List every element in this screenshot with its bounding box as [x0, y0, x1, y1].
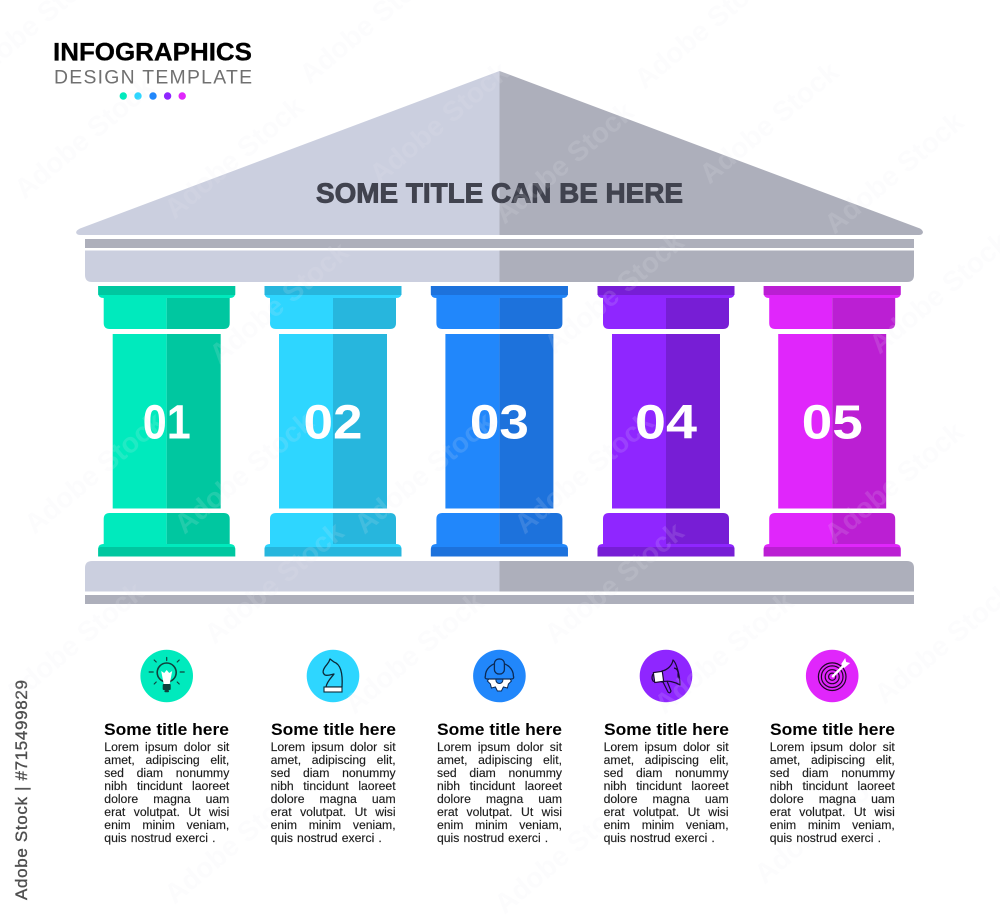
text: nibh tincidunt laoreet [104, 779, 229, 793]
text: enim minim veniam, [104, 818, 229, 832]
text: quis nostrud exerci . [104, 831, 215, 845]
column 03: 03 [470, 396, 529, 450]
text: erat volutpat. Ut wisi [437, 805, 562, 819]
column 04: 04 [635, 396, 697, 450]
text: nibh tincidunt laoreet [271, 779, 396, 793]
text: erat volutpat. Ut wisi [271, 805, 396, 819]
text: erat volutpat. Ut wisi [604, 805, 729, 819]
logo heading: infographics design template: DESIGN TEMPLATE [54, 66, 252, 88]
icon: chess knight [307, 650, 359, 702]
text: quis nostrud exerci . [271, 831, 382, 845]
stock watermark: Adobe Stock [818, 416, 970, 550]
text: enim minim veniam, [770, 818, 895, 832]
logo heading: infographics design template [53, 39, 252, 100]
text: nibh tincidunt laoreet [604, 779, 729, 793]
text: enim minim veniam, [271, 818, 396, 832]
stock watermark: Adobe Stock [203, 236, 355, 370]
text block 3 [437, 721, 562, 845]
stock watermark: Adobe Stock [8, 71, 160, 205]
stock watermark: Adobe Stock [538, 516, 690, 650]
text: sed diam nonummy [104, 766, 229, 780]
stock watermark: Adobe Stock [748, 756, 900, 890]
text: Lorem ipsum dolor sit [104, 740, 229, 754]
text: dolore magna uam [604, 792, 729, 806]
text: amet, adipiscing elit, [770, 753, 895, 767]
icon: hard hat with gear [473, 650, 526, 702]
roof title: SOME TITLE CAN BE HERE [316, 178, 683, 208]
logo heading: infographics design template: INFOGRAPHICS [53, 39, 252, 67]
text block 4 [604, 721, 729, 845]
text: erat volutpat. Ut wisi [104, 805, 229, 819]
text: sed diam nonummy [271, 766, 396, 780]
text: Lorem ipsum dolor sit [437, 740, 562, 754]
temple base: plinth and lower strip [85, 561, 914, 604]
stock watermark: Adobe Stock [338, 586, 490, 720]
text: quis nostrud exerci . [770, 831, 881, 845]
text: Some title here [604, 721, 729, 739]
icon: megaphone [640, 650, 692, 702]
text: Some title here [437, 721, 562, 739]
column 02 [264, 286, 402, 556]
text: Lorem ipsum dolor sit [271, 740, 396, 754]
column 02: 02 [303, 396, 363, 450]
entablature: upper strip and beam [85, 239, 914, 282]
column 03 [431, 286, 568, 556]
text: sed diam nonummy [604, 766, 729, 780]
text: dolore magna uam [770, 792, 895, 806]
stock watermark: Adobe Stock [693, 56, 845, 190]
text block 1 [104, 721, 230, 845]
text: dolore magna uam [271, 792, 396, 806]
stock watermark: Adobe Stock [488, 786, 640, 916]
stock watermark: Adobe Stock [198, 516, 350, 650]
stock watermark: Adobe Stock [18, 406, 170, 540]
text: Some title here [770, 721, 895, 739]
text: quis nostrud exerci . [604, 831, 715, 845]
stock watermark: Adobe Stock [648, 586, 800, 720]
column 04 [598, 286, 734, 556]
column 05: 05 [802, 396, 863, 450]
text: sed diam nonummy [437, 766, 562, 780]
stock watermark: Adobe Stock [508, 406, 660, 540]
text: Some title here [104, 721, 229, 739]
stock watermark: Adobe Stock [538, 226, 690, 360]
text: amet, adipiscing elit, [604, 753, 729, 767]
text: Some title here [271, 721, 396, 739]
icon: light bulb [140, 650, 193, 702]
text: enim minim veniam, [437, 818, 562, 832]
text: dolore magna uam [437, 792, 562, 806]
text block 2 [270, 721, 396, 845]
text: amet, adipiscing elit, [437, 753, 562, 767]
stock watermark: Adobe Stock [158, 776, 310, 910]
column 01: 01 [143, 396, 191, 450]
icon: target with arrow [806, 650, 858, 702]
text: sed diam nonummy [770, 766, 895, 780]
text: enim minim veniam, [604, 818, 729, 832]
text: dolore magna uam [104, 792, 229, 806]
stock watermark: Adobe Stock [168, 406, 320, 540]
stock id label: Adobe Stock | #715499829 [12, 680, 31, 900]
column 01 [98, 286, 235, 556]
text: amet, adipiscing elit, [104, 753, 229, 767]
temple roof [76, 71, 923, 235]
stock watermark: Adobe Stock [488, 96, 640, 230]
text block 5 [770, 721, 895, 845]
text: Lorem ipsum dolor sit [604, 740, 729, 754]
text: nibh tincidunt laoreet [770, 779, 895, 793]
text: amet, adipiscing elit, [271, 753, 396, 767]
column 05 [764, 286, 901, 556]
stock watermark: Adobe Stock [0, 576, 150, 710]
stock watermark: Adobe Stock [348, 406, 500, 540]
text: Lorem ipsum dolor sit [770, 740, 895, 754]
stock watermark: Adobe Stock [818, 106, 970, 240]
text: quis nostrud exerci . [437, 831, 548, 845]
stock watermark: Adobe Stock [363, 56, 515, 190]
text: erat volutpat. Ut wisi [770, 805, 895, 819]
text: nibh tincidunt laoreet [437, 779, 562, 793]
stock watermark: Adobe Stock [158, 91, 310, 225]
